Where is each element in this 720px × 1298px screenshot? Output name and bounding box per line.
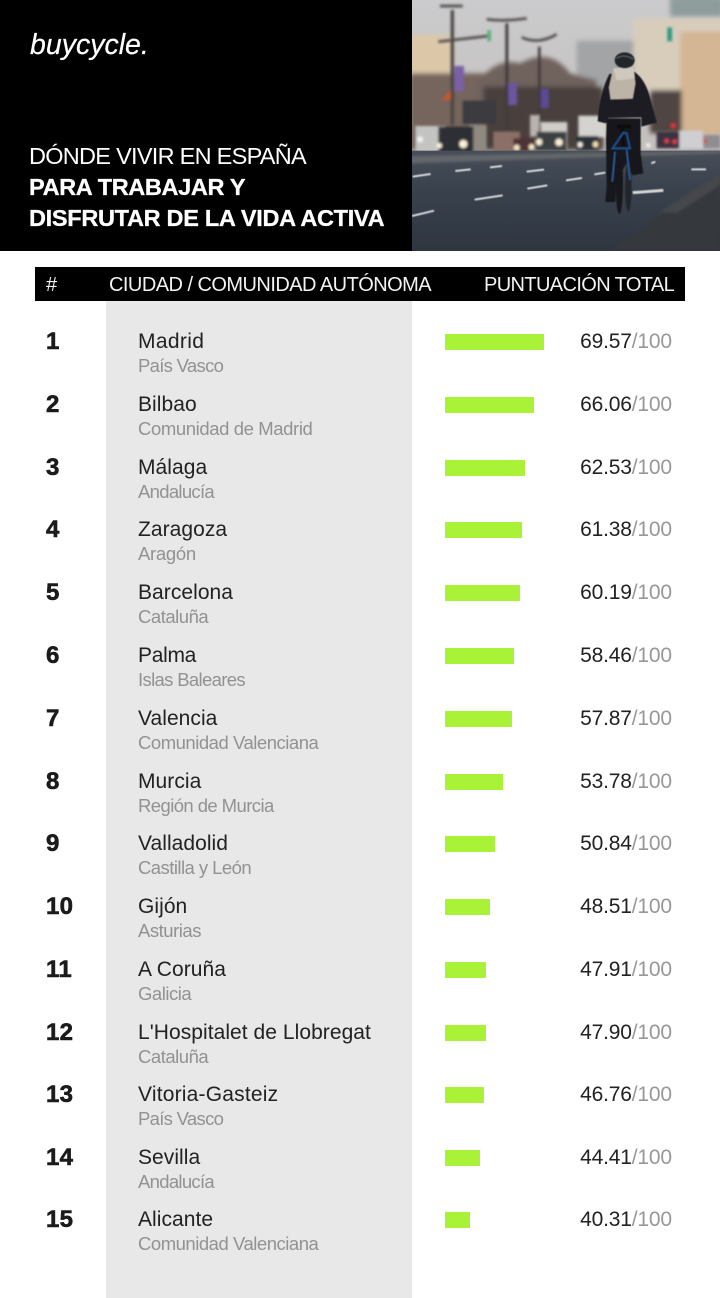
row 4: Aragón: [138, 543, 196, 564]
row 7: Comunidad Valenciana: [138, 732, 318, 753]
row 8: 8: [46, 768, 60, 795]
row 3: Andalucía: [138, 481, 214, 502]
row 13: País Vasco: [138, 1108, 223, 1129]
row 15: [46, 1206, 672, 1254]
column heading: city: CIUDAD / COMUNIDAD AUTÓNOMA: [109, 274, 431, 296]
row 6: 6: [46, 642, 60, 669]
title line two: PARA TRABAJAR Y: [29, 174, 245, 200]
row 11: [46, 956, 672, 1004]
row 7: Valencia: [138, 707, 217, 730]
row 4: 4: [46, 516, 60, 543]
row 13: 13: [46, 1081, 73, 1108]
row 11: 11: [46, 956, 72, 983]
row 7: [46, 705, 672, 753]
row 1: 1: [46, 328, 60, 355]
row 13: [46, 1081, 672, 1129]
row 14: Andalucía: [138, 1171, 214, 1192]
row 4: 61.38/100: [580, 518, 672, 541]
row 6: 58.46/100: [580, 644, 672, 667]
row 4: [46, 516, 672, 564]
row 7: 57.87/100: [580, 707, 672, 730]
row 12: [46, 1019, 672, 1067]
row 10: [46, 893, 672, 941]
row 15: 40.31/100: [580, 1208, 672, 1231]
row 5: 60.19/100: [580, 581, 672, 604]
row 8: 53.78/100: [580, 770, 672, 793]
row 14: 44.41/100: [580, 1146, 672, 1169]
row 15: 15: [46, 1206, 73, 1233]
row 12: 12: [46, 1019, 73, 1046]
row 8: Murcia: [138, 770, 201, 793]
row 1: 69.57/100: [580, 330, 672, 353]
row 1: País Vasco: [138, 355, 223, 376]
row 9: 50.84/100: [580, 832, 672, 855]
logo: buycycle: buycycle.: [30, 29, 149, 61]
row 12: Cataluña: [138, 1046, 208, 1067]
row 2: 66.06/100: [580, 393, 672, 416]
row 10: Gijón: [138, 895, 187, 918]
row 5: [46, 579, 672, 627]
row 5: 5: [46, 579, 60, 606]
row 6: [46, 642, 672, 690]
row 3: 3: [46, 454, 60, 481]
grey city column: [106, 301, 412, 1298]
row 11: 47.91/100: [580, 958, 672, 981]
row 14: 14: [46, 1144, 73, 1171]
row 11: A Coruña: [138, 958, 226, 981]
row 12: 47.90/100: [580, 1021, 672, 1044]
row 14: Sevilla: [138, 1146, 200, 1169]
title line one: DÓNDE VIVIR EN ESPAÑA: [29, 143, 306, 169]
row 9: Castilla y León: [138, 857, 251, 878]
photo: cyclist on a city avenue: [412, 0, 720, 251]
row 3: 62.53/100: [580, 456, 672, 479]
row 12: L'Hospitalet de Llobregat: [138, 1021, 371, 1044]
row 14: [46, 1144, 672, 1192]
header panel: [0, 0, 412, 251]
row 2: [46, 391, 672, 439]
column heading: score: PUNTUACIÓN TOTAL: [484, 274, 674, 296]
table header bar: [35, 267, 685, 301]
row 2: Bilbao: [138, 393, 197, 416]
row 10: Asturias: [138, 920, 201, 941]
row 2: 2: [46, 391, 60, 418]
row 11: Galicia: [138, 983, 191, 1004]
row 13: Vitoria-Gasteiz: [138, 1083, 278, 1106]
row 10: 10: [46, 893, 73, 920]
row 10: 48.51/100: [580, 895, 672, 918]
row 6: Islas Baleares: [138, 669, 245, 690]
title: [29, 143, 384, 231]
row 15: Comunidad Valenciana: [138, 1233, 318, 1254]
row 3: [46, 454, 672, 502]
row 5: Cataluña: [138, 606, 208, 627]
row 8: Región de Murcia: [138, 795, 274, 816]
row 6: Palma: [138, 644, 196, 667]
title line three: DISFRUTAR DE LA VIDA ACTIVA: [29, 205, 384, 231]
row 8: [46, 768, 672, 816]
row 3: Málaga: [138, 456, 207, 479]
row 9: Valladolid: [138, 832, 228, 855]
row 4: Zaragoza: [138, 518, 227, 541]
row 5: Barcelona: [138, 581, 233, 604]
column heading: rank: #: [46, 274, 57, 296]
row 7: 7: [46, 705, 60, 732]
row 15: Alicante: [138, 1208, 213, 1231]
row 9: 9: [46, 830, 60, 857]
row 9: [46, 830, 672, 878]
row 1: Madrid: [138, 330, 204, 353]
row 1: [46, 328, 672, 376]
row 2: Comunidad de Madrid: [138, 418, 312, 439]
row 13: 46.76/100: [580, 1083, 672, 1106]
